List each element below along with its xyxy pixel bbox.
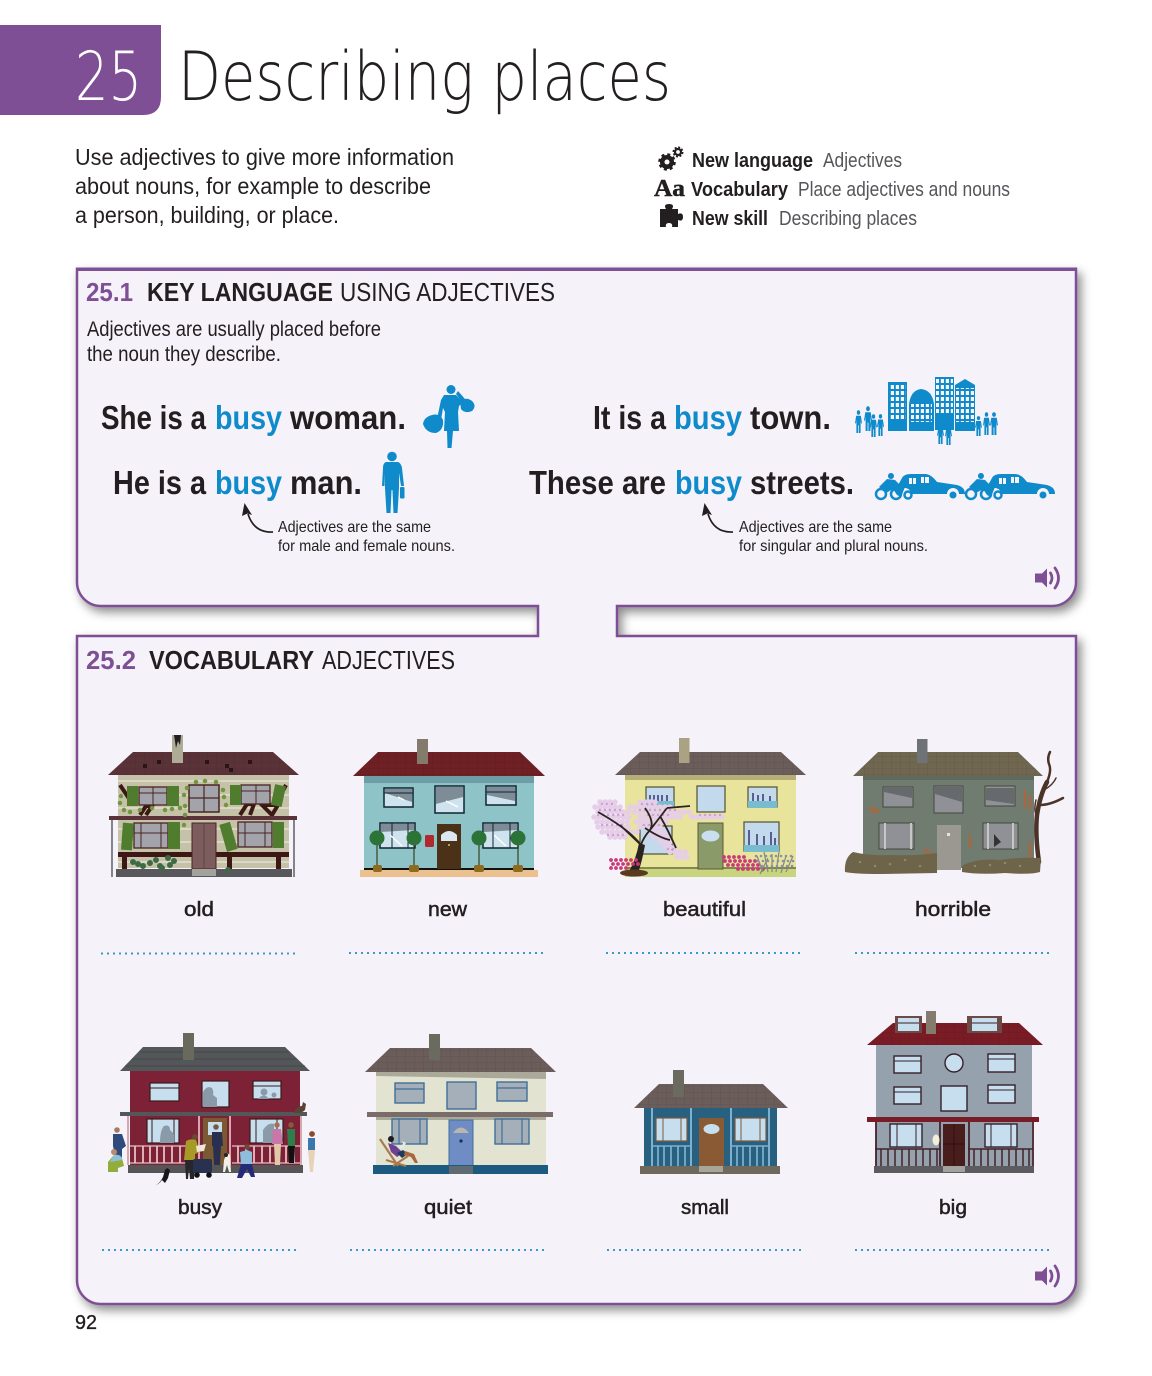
heading 25.1: USING ADJECTIVES: [340, 277, 555, 307]
answer line: horrible: [855, 952, 1052, 954]
heading 25.1: 25.1: [86, 277, 133, 307]
sentence: he is a busy man: man.: [290, 464, 362, 501]
sentence: she is a busy woman: busy: [215, 399, 283, 436]
text: describing places: Describing places: [779, 208, 917, 230]
flower beds: [611, 852, 796, 874]
learning objectives: [654, 147, 1010, 230]
note: singular and plural nouns: Adjectives are the same: [739, 519, 892, 536]
explanation text: [87, 318, 381, 366]
answer line: small: [607, 1249, 804, 1251]
house: new: [353, 739, 545, 877]
chapter number badge: 25: [75, 38, 142, 117]
note arrow: singular and plural: [702, 503, 733, 532]
note: singular and plural nouns: [739, 519, 928, 555]
explanation text: the noun they describe.: [87, 343, 281, 366]
label: vocabulary: Vocabulary: [691, 179, 789, 201]
bare tree: [1035, 752, 1063, 862]
person relaxing in a deck chair: [380, 1136, 418, 1166]
page number: 92: [75, 1312, 97, 1334]
label: new language: New language: [692, 150, 813, 172]
house: big: [867, 1011, 1043, 1173]
people around the busy house: [108, 1102, 315, 1185]
heading 25.2: VOCABULARY: [149, 645, 314, 675]
house: beautiful: [594, 738, 806, 877]
explanation text: Adjectives are usually placed before: [87, 318, 381, 341]
heading 25.1: [86, 277, 555, 307]
note: singular and plural nouns: for singular and plural nouns.: [739, 538, 928, 555]
label: horrible: horrible: [915, 899, 991, 921]
answer line: busy: [102, 1249, 299, 1251]
note: male and female nouns: Adjectives are the same: [278, 519, 431, 536]
panel outline: exercises 25.1 and 25.2: [77, 269, 1076, 1304]
sentence: these are busy streets: These are: [529, 464, 666, 501]
icon: busy town: [855, 377, 998, 445]
answer line: quiet: [350, 1249, 547, 1251]
sentence: he is a busy man: busy: [215, 464, 283, 501]
sentence: it is a busy town: [593, 399, 831, 436]
house: quiet: [365, 1034, 556, 1174]
note: male and female nouns: for male and female nouns.: [278, 538, 455, 555]
house: horrible: [845, 739, 1063, 874]
icon: Aa: Aa: [654, 176, 685, 202]
note: male and female nouns: [278, 519, 455, 555]
icon: busy street traffic: [876, 473, 1055, 499]
icon: puzzle piece: [660, 204, 683, 227]
title: Describing places: [178, 38, 671, 117]
blossom tree: [594, 802, 727, 876]
sentence: she is a busy woman: [101, 399, 406, 436]
answer line: old: [101, 952, 298, 954]
house: busy: [108, 1033, 315, 1185]
label: busy: busy: [178, 1197, 222, 1219]
icon: busy woman: [423, 385, 474, 448]
chapter number badge: [0, 25, 161, 117]
label: old: old: [184, 899, 214, 921]
label: big: big: [939, 1197, 967, 1219]
heading 25.1: KEY LANGUAGE: [147, 277, 333, 307]
icon: businessman: [382, 452, 404, 513]
sentence: she is a busy woman: She is a: [101, 399, 207, 436]
house: old: [108, 735, 299, 877]
sentence: these are busy streets: streets.: [750, 464, 854, 501]
sentence: she is a busy woman: woman.: [289, 399, 406, 436]
label: beautiful: beautiful: [663, 899, 746, 921]
note arrow: male and female: [242, 503, 273, 532]
sentence: he is a busy man: He is a: [113, 464, 207, 501]
intro text: a person, building, or place.: [75, 202, 339, 228]
sentence: it is a busy town: busy: [674, 399, 743, 436]
heading 25.2: 25.2: [86, 645, 136, 675]
panel: 25.1 key language: [86, 277, 1058, 588]
heading 25.2: ADJECTIVES: [322, 645, 455, 675]
icon: audio speaker: [1035, 568, 1058, 588]
intro text: about nouns, for example to describe: [75, 173, 431, 199]
house: small: [634, 1070, 788, 1174]
text: adjectives: Adjectives: [823, 150, 902, 172]
sentence: it is a busy town: town.: [750, 399, 831, 436]
answer line: beautiful: [606, 952, 803, 954]
sentence: it is a busy town: It is a: [593, 399, 667, 436]
heading 25.2: [86, 645, 455, 675]
intro text: [75, 144, 454, 228]
label: new: new: [428, 899, 468, 921]
panel: 25.2 vocabulary: [86, 645, 1063, 1286]
sentence: he is a busy man: [113, 464, 362, 501]
icon: audio speaker: [1035, 1266, 1058, 1286]
label: new skill: New skill: [692, 208, 768, 230]
label: quiet: quiet: [424, 1197, 472, 1219]
text: place adjectives and nouns: Place adjectives and nouns: [798, 179, 1010, 201]
answer line: new: [349, 952, 546, 954]
sentence: these are busy streets: busy: [675, 464, 743, 501]
sentence: these are busy streets: [529, 464, 854, 501]
icon: gears: [660, 147, 683, 169]
answer line: big: [855, 1249, 1052, 1251]
label: small: small: [681, 1197, 729, 1219]
intro text: Use adjectives to give more information: [75, 144, 454, 170]
